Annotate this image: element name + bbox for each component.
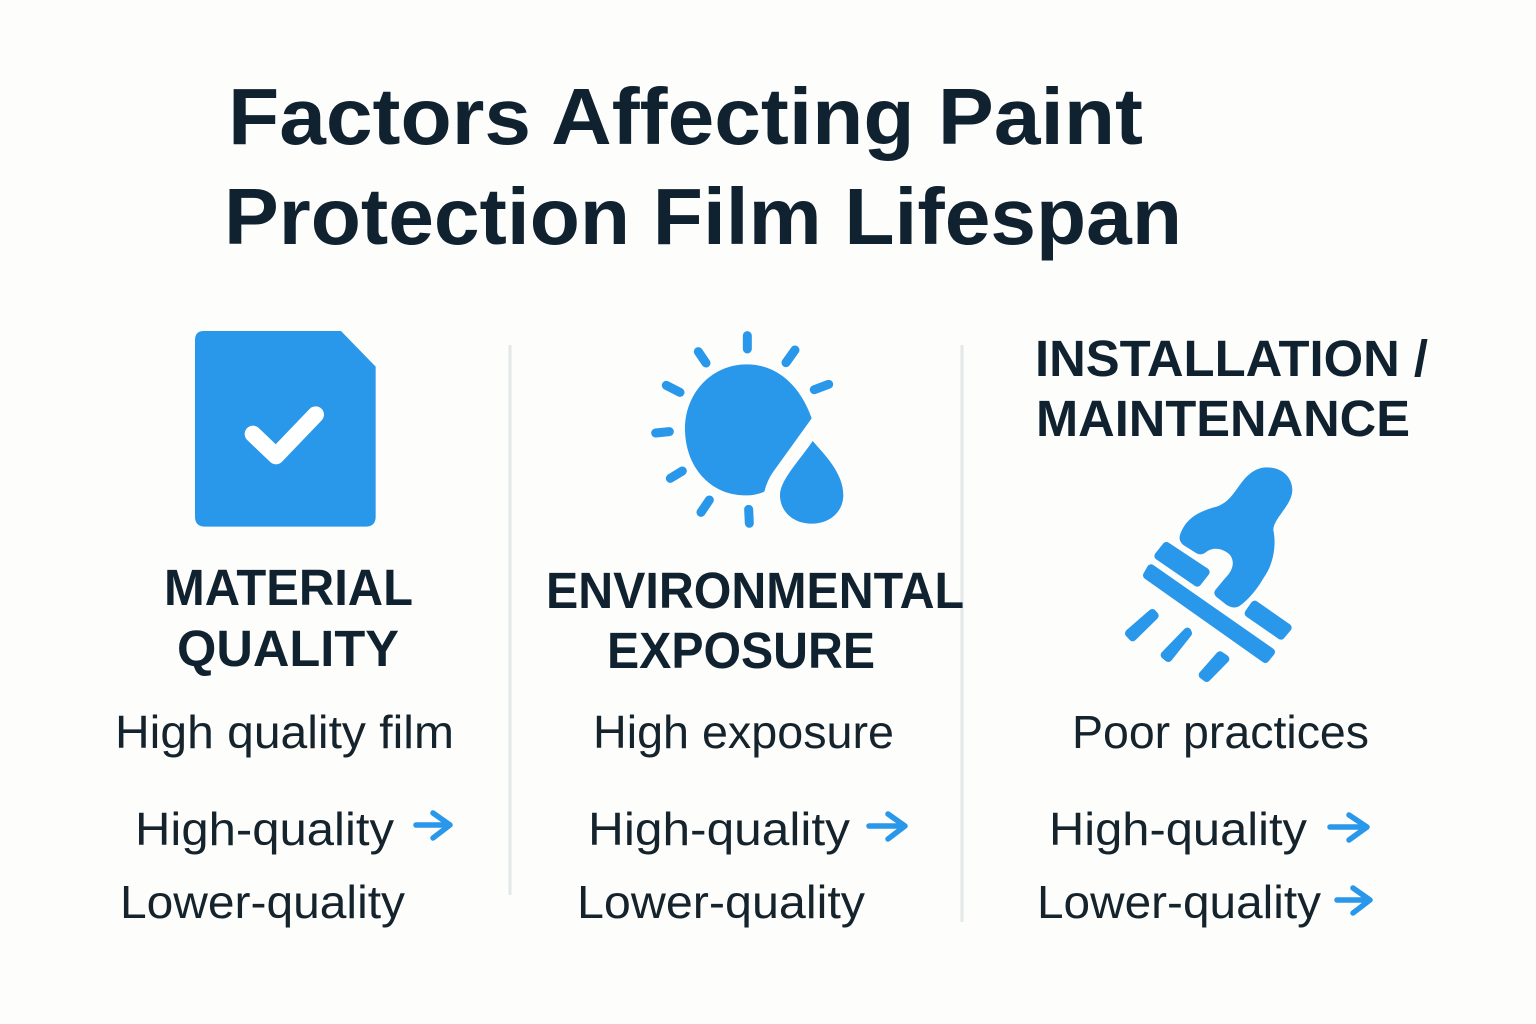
arrow xyxy=(1337,888,1370,913)
heading: installation / maintenance xyxy=(1035,330,1428,447)
heading: environmental exposure xyxy=(546,562,964,679)
panel: material quality xyxy=(115,331,454,928)
arrow xyxy=(869,814,905,839)
arrow xyxy=(1330,815,1367,840)
heading: environmental exposure: EXPOSURE xyxy=(607,622,875,679)
text: lower-quality: Lower-quality xyxy=(1037,876,1321,928)
text: high-quality: High-quality xyxy=(588,803,850,855)
title: Factors Affecting Paint xyxy=(228,72,1143,161)
icon: sun and water drop xyxy=(656,336,843,524)
text: high quality film: High quality film xyxy=(115,706,454,758)
icon: document with check mark xyxy=(195,331,376,527)
text: high exposure: High exposure xyxy=(593,706,894,758)
text: lower-quality: Lower-quality xyxy=(577,876,865,928)
heading: material quality xyxy=(164,559,413,677)
icon: brush xyxy=(1129,467,1292,678)
text: high-quality: High-quality xyxy=(135,803,394,855)
title xyxy=(224,72,1182,261)
heading: installation / maintenance: MAINTENANCE xyxy=(1036,390,1410,447)
heading: environmental exposure: ENVIRONMENTAL xyxy=(546,562,964,619)
text: poor practices: Poor practices xyxy=(1072,706,1369,758)
heading: installation / maintenance: INSTALLATION / xyxy=(1035,330,1428,387)
heading: material quality: MATERIAL xyxy=(164,559,413,616)
heading: material quality: QUALITY xyxy=(177,620,399,677)
title: Protection Film Lifespan xyxy=(224,172,1182,261)
text: lower-quality: Lower-quality xyxy=(120,876,405,928)
panel: installation / maintenance xyxy=(1035,330,1428,928)
text: high-quality: High-quality xyxy=(1049,803,1307,855)
arrow xyxy=(416,813,450,838)
panel: environmental exposure xyxy=(546,336,964,928)
